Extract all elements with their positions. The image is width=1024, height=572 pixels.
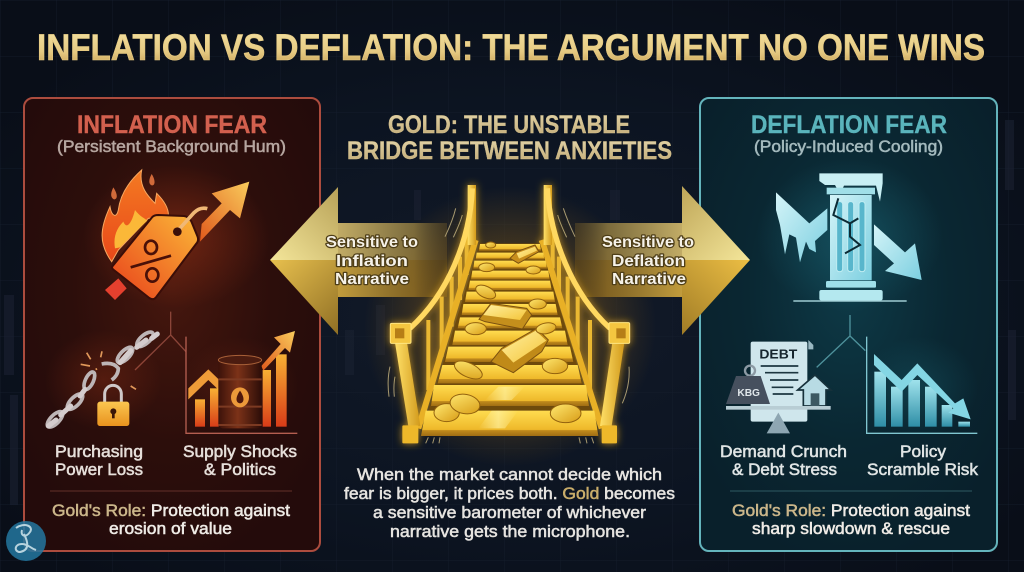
- arrow: toward deflation: [575, 186, 750, 335]
- centre explanation text: [344, 465, 675, 541]
- sway marks: [388, 208, 629, 443]
- icon: broken chain and padlock: [45, 330, 162, 430]
- gold's role: inflation: erosion of value: [109, 519, 232, 538]
- icon: debt document, weight and house on a scale: [726, 340, 831, 433]
- arrow label: sensitive to deflation narrative: Narrative: [612, 271, 686, 288]
- arrow label: sensitive to deflation narrative: Deflation: [612, 253, 685, 270]
- icon: debt document, weight and house on a scale: KBG: [737, 388, 760, 399]
- bridge rails and posts: [390, 185, 630, 443]
- arrow label: sensitive to inflation narrative: Sensitive to: [326, 234, 418, 251]
- label: supply shocks and politics: & Politics: [204, 460, 276, 479]
- logo badge: [6, 521, 46, 561]
- arrow label: sensitive to deflation narrative: Sensitive to: [602, 234, 694, 251]
- label: purchasing power loss: Power Loss: [55, 460, 143, 479]
- centre explanation text: narrative gets the microphone.: [390, 522, 630, 541]
- arrow: toward inflation: [270, 187, 447, 335]
- inflation subheading: (Persistent Background Hum): [57, 137, 286, 156]
- label: policy scramble risk: Scramble Risk: [867, 460, 978, 479]
- gold coins: [434, 242, 581, 423]
- centre heading: GOLD: THE UNSTABLE: [388, 111, 630, 139]
- deflation subheading: (Policy-Induced Cooling): [754, 137, 943, 156]
- label: purchasing power loss: Purchasing: [55, 442, 143, 461]
- label: demand crunch and debt stress: & Debt Stress: [732, 460, 837, 479]
- label: demand crunch and debt stress: Demand Crunch: [720, 442, 847, 461]
- gold's role: inflation: [50, 491, 292, 538]
- gold's role: deflation: Gold's Role: Protection against: [732, 501, 970, 520]
- arrow label: sensitive to inflation narrative: Inflation: [336, 253, 408, 270]
- icon: falling bar chart: [862, 337, 978, 437]
- centre explanation text: fear is bigger, it prices both. Gold becomes: [344, 484, 675, 503]
- bridge deck: [421, 243, 598, 436]
- panel: deflation fear: [700, 98, 997, 551]
- connector lines: [135, 312, 297, 433]
- label: policy scramble risk: [867, 442, 978, 479]
- gold's role: deflation: [730, 491, 972, 538]
- label: supply shocks and politics: Supply Shocks: [183, 442, 297, 461]
- label: demand crunch and debt stress: [720, 442, 847, 479]
- bridge of gold: [363, 185, 657, 467]
- arrow label: sensitive to deflation narrative: [602, 234, 694, 288]
- arrow label: sensitive to inflation narrative: Narrative: [335, 271, 409, 288]
- deflation heading: DEFLATION FEAR: [751, 111, 947, 139]
- gold's role: inflation: Gold's Role: Protection against: [52, 501, 290, 520]
- label: purchasing power loss: [55, 442, 143, 479]
- icon: oil barrel and rising bars: [182, 331, 298, 437]
- centre explanation text: When the market cannot decide which: [357, 465, 662, 484]
- connector lines: [817, 315, 977, 433]
- icon: burning price tag with rising arrow: [83, 165, 270, 308]
- centre heading: [347, 111, 672, 165]
- centre explanation text: a sensitive barometer of whichever: [373, 503, 646, 522]
- icon: frozen cracked pillar with falling arrow: [757, 158, 943, 312]
- icon: debt document, weight and house on a scale: DEBT: [759, 347, 798, 361]
- centre heading: BRIDGE BETWEEN ANXIETIES: [347, 137, 672, 165]
- inflation heading: INFLATION FEAR: [77, 111, 267, 139]
- label: policy scramble risk: Policy: [900, 442, 946, 461]
- label: supply shocks and politics: [183, 442, 297, 479]
- gold bars: [479, 245, 548, 373]
- panel: inflation fear: [24, 98, 320, 551]
- gold's role: deflation: sharp slowdown & rescue: [752, 519, 950, 538]
- arrow label: sensitive to inflation narrative: [326, 234, 418, 288]
